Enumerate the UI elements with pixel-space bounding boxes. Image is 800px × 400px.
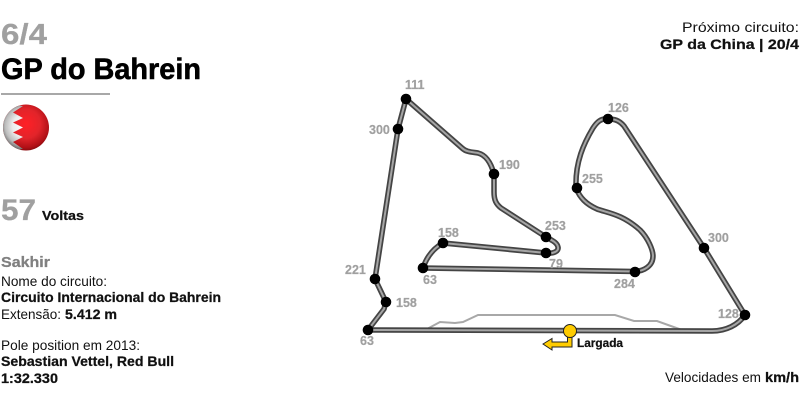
speed labels: 126 bbox=[608, 101, 629, 115]
circuit info: 5.412 m bbox=[65, 306, 117, 322]
speed labels bbox=[345, 78, 739, 348]
circuit info: Circuito Internacional do Bahrein bbox=[1, 289, 221, 305]
pole position bbox=[1, 337, 174, 386]
icon: Bahrain flag bbox=[0, 104, 49, 151]
title: GP do Bahrein bbox=[1, 53, 201, 86]
speed markers bbox=[363, 94, 750, 335]
next circuit: GP da China | 20/4 bbox=[660, 36, 799, 52]
date: 6/4 bbox=[1, 19, 47, 51]
speed labels: 300 bbox=[708, 231, 729, 245]
laps: Voltas bbox=[42, 208, 84, 223]
circuit info: Nome do circuito: bbox=[1, 273, 107, 289]
speed labels: 63 bbox=[360, 334, 374, 348]
units note: Velocidades em bbox=[665, 369, 761, 385]
pole position: 1:32.330 bbox=[1, 370, 58, 386]
speed labels: 111 bbox=[405, 78, 425, 92]
laps: 57 bbox=[1, 194, 36, 227]
track circuit bbox=[368, 99, 745, 331]
speed labels: 300 bbox=[369, 123, 390, 137]
speed labels: 255 bbox=[582, 172, 603, 186]
title rule bbox=[1, 93, 110, 95]
speed labels: 284 bbox=[614, 277, 635, 291]
speed labels: 128 bbox=[718, 307, 739, 321]
speed labels: 158 bbox=[438, 226, 459, 240]
laps bbox=[1, 194, 84, 227]
speed labels: 63 bbox=[423, 273, 437, 287]
next circuit: Próximo circuito: bbox=[682, 19, 799, 35]
circuit info: Extensão: bbox=[1, 306, 61, 322]
speed labels: 190 bbox=[499, 158, 520, 172]
start marker and arrow bbox=[543, 324, 576, 350]
speed labels: 221 bbox=[345, 263, 366, 277]
units note: km/h bbox=[765, 369, 799, 385]
pit lane bbox=[427, 315, 682, 330]
circuit info bbox=[1, 254, 221, 322]
pole position: Sebastian Vettel, Red Bull bbox=[1, 353, 174, 369]
circuit info: Sakhir bbox=[1, 254, 50, 271]
speed labels: 158 bbox=[396, 296, 417, 310]
speed labels: 79 bbox=[549, 257, 563, 271]
start label: Largada bbox=[577, 338, 624, 350]
pole position: Pole position em 2013: bbox=[1, 337, 140, 353]
speed labels: 253 bbox=[545, 219, 566, 233]
next circuit bbox=[660, 19, 799, 52]
